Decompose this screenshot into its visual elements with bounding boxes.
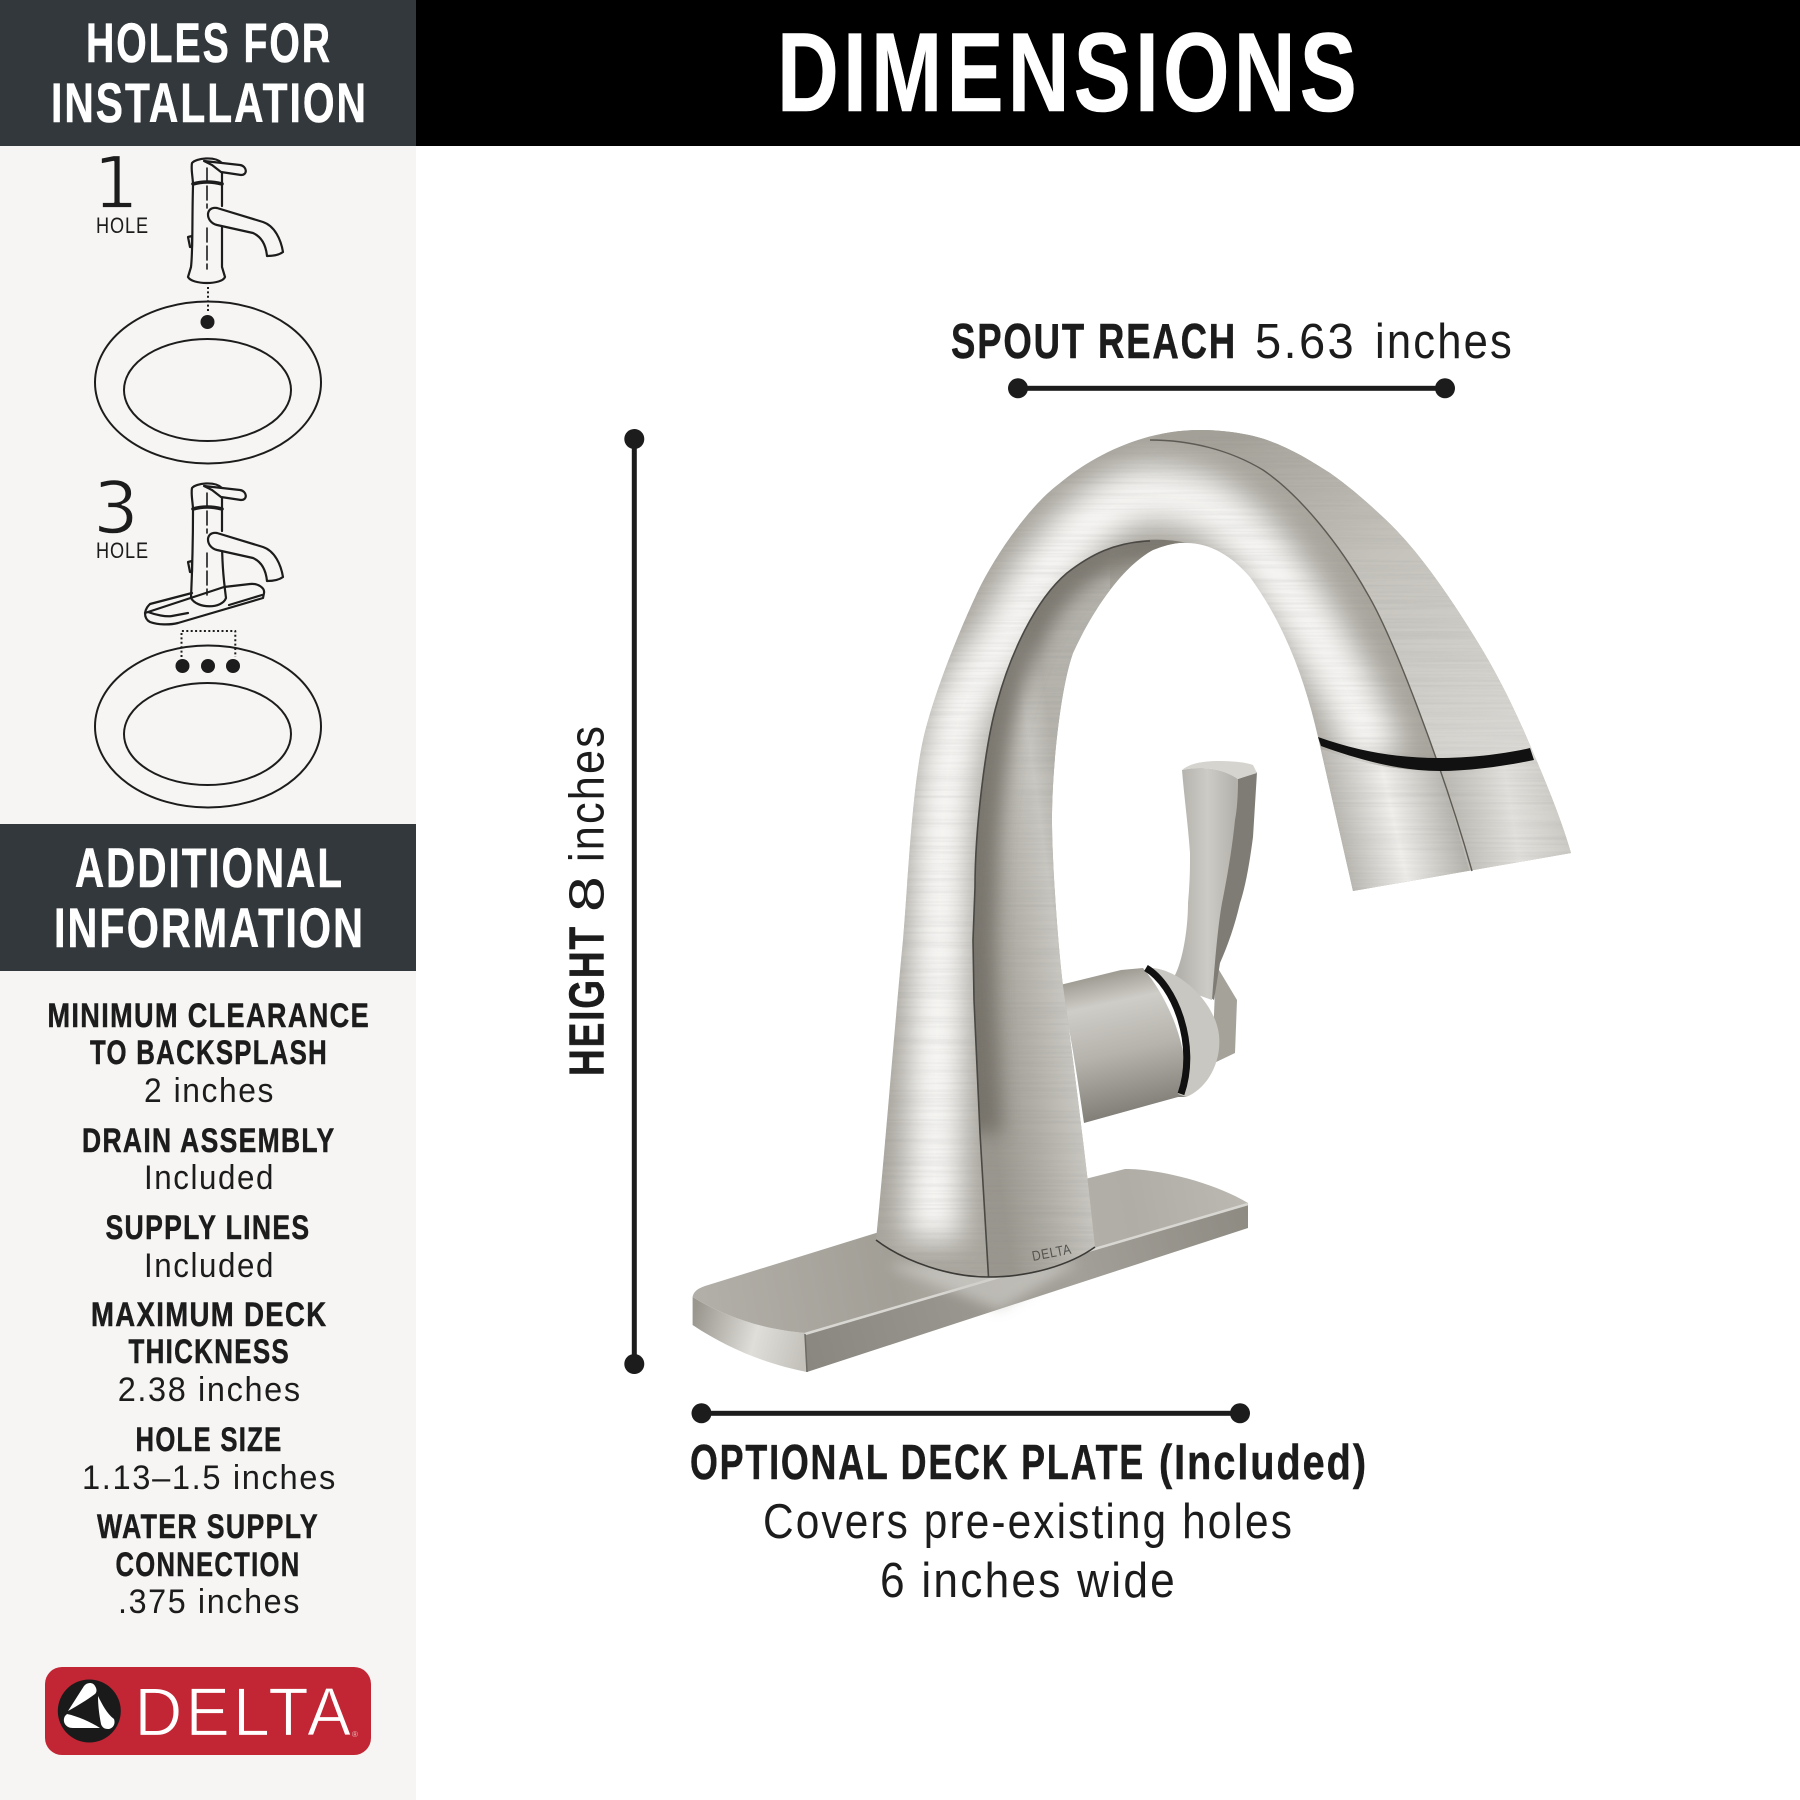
panel: left sidebar background xyxy=(0,146,416,1800)
lit ridge along the tube xyxy=(933,494,1375,1240)
outer right section of spout xyxy=(1162,430,1536,760)
header: holes for installation xyxy=(0,0,416,146)
logo: delta xyxy=(45,1667,371,1755)
deck plate label: 6 inches wide xyxy=(880,1554,1177,1608)
spout reach label: inches xyxy=(1375,315,1514,369)
height measure line xyxy=(624,429,644,1374)
spray head lower right xyxy=(1441,759,1571,871)
spec: drain assembly: DRAIN ASSEMBLY xyxy=(82,1122,336,1160)
height label xyxy=(560,724,614,1076)
spec: minimum clearance: MINIMUM CLEARANCE xyxy=(48,997,370,1035)
header: additional information: ADDITIONAL xyxy=(75,836,344,899)
sink with three holes xyxy=(95,646,321,808)
spec: maximum deck thickness: THICKNESS xyxy=(128,1333,290,1371)
height label: 8 xyxy=(560,873,614,912)
handle cylinder and ring xyxy=(1060,968,1219,1123)
spec: drain assembly: Included xyxy=(144,1159,275,1197)
deck plate label: (Included) xyxy=(1159,1436,1368,1490)
height dimension xyxy=(560,429,644,1374)
spec: maximum deck thickness: 2.38 inches xyxy=(118,1371,302,1409)
spray head lower left xyxy=(1320,749,1470,891)
height label: inches xyxy=(560,724,614,862)
header: additional information xyxy=(0,824,416,971)
spec: hole size xyxy=(82,1421,337,1497)
icon: delta triangle mark xyxy=(58,1680,121,1742)
deck plate measure line xyxy=(692,1403,1250,1423)
handle xyxy=(1170,761,1257,1064)
text block: additional information list xyxy=(48,997,370,1621)
spout reach label: SPOUT REACH xyxy=(951,315,1237,369)
icon: one hole installation xyxy=(93,141,321,464)
spec: water supply connection: CONNECTION xyxy=(116,1546,300,1584)
faucet drawing one hole xyxy=(188,158,283,313)
title: DIMENSIONS xyxy=(777,10,1361,135)
header: holes for installation: HOLES FOR xyxy=(86,11,332,74)
header bar: dimensions xyxy=(416,0,1800,146)
spec: minimum clearance: TO BACKSPLASH xyxy=(90,1034,328,1072)
spec: hole size: 1.13–1.5 inches xyxy=(82,1459,337,1497)
deck plate label: Covers pre-existing holes xyxy=(763,1495,1294,1549)
spec: minimum clearance xyxy=(48,997,370,1110)
inner face seam shadow xyxy=(973,540,1187,1133)
spout reach dimension xyxy=(951,315,1514,398)
spec: water supply connection: WATER SUPPLY xyxy=(97,1508,319,1546)
number 3 label: 3 xyxy=(93,466,142,550)
engraved delta mark: DELTA xyxy=(1031,1241,1073,1264)
seams and black ring on spout xyxy=(876,440,1534,1277)
spec: water supply connection xyxy=(97,1508,319,1621)
spec: minimum clearance: 2 inches xyxy=(144,1072,275,1110)
spout reach label: 5.63 xyxy=(1255,315,1356,369)
icon: three hole installation xyxy=(93,466,321,808)
faucet product image xyxy=(693,420,1600,1372)
spec: supply lines: Included xyxy=(144,1247,275,1285)
number 1 label: 1 xyxy=(93,141,142,225)
spec: supply lines xyxy=(106,1209,310,1285)
faucet drawing with deck plate xyxy=(145,483,283,657)
inner face and lower right body xyxy=(980,564,1110,1276)
sink with one hole xyxy=(95,302,321,464)
spec: maximum deck thickness: MAXIMUM DECK xyxy=(91,1296,328,1334)
spout reach label xyxy=(951,315,1514,369)
number 1 label: HOLE xyxy=(96,213,149,238)
deck plate label xyxy=(690,1436,1368,1608)
spout reach measure line xyxy=(1008,378,1455,398)
spec: drain assembly xyxy=(82,1122,336,1197)
header: additional information: INFORMATION xyxy=(54,896,365,959)
spec: hole size: HOLE SIZE xyxy=(136,1421,282,1459)
deck plate label: OPTIONAL DECK PLATE xyxy=(690,1436,1145,1490)
header: holes for installation: INSTALLATION xyxy=(51,71,368,134)
height label: HEIGHT xyxy=(560,925,614,1076)
logo: delta: DELTA xyxy=(134,1674,354,1750)
spec: supply lines: SUPPLY LINES xyxy=(106,1209,310,1247)
number 3 label: HOLE xyxy=(96,538,149,563)
spec: maximum deck thickness xyxy=(91,1296,328,1409)
deck plate dimension xyxy=(690,1403,1368,1608)
logo: delta: ® xyxy=(352,1730,358,1739)
deck plate xyxy=(693,1169,1248,1372)
spec: water supply connection: .375 inches xyxy=(118,1583,301,1621)
faucet tube body xyxy=(860,420,1600,1290)
